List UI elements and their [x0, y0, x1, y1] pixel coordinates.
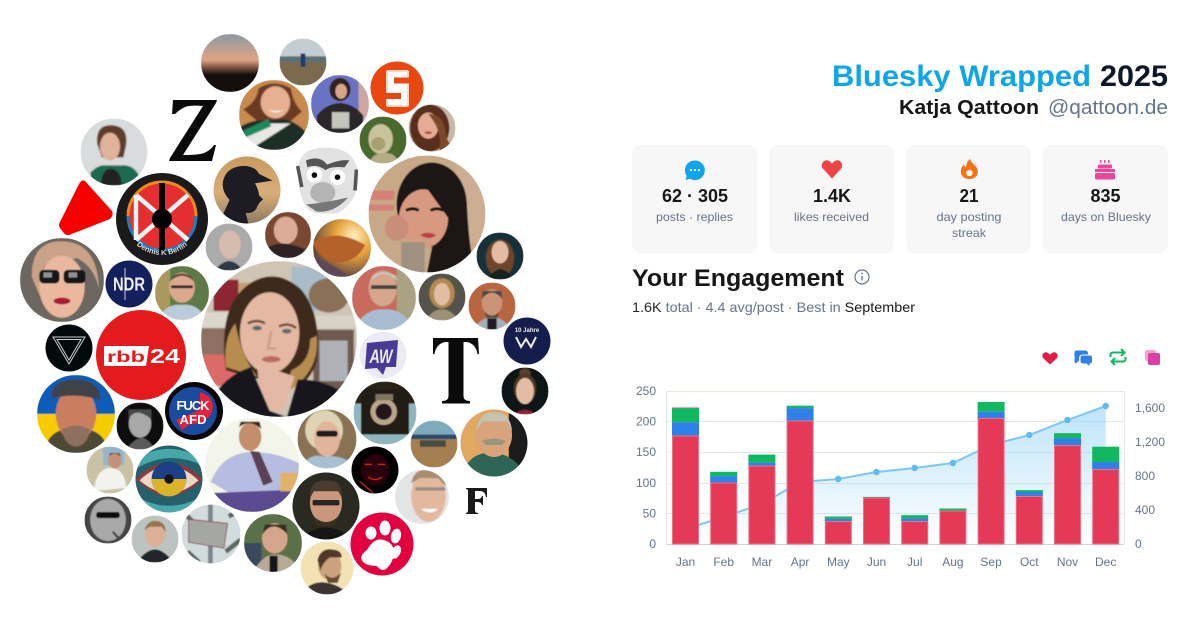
- logo: AW speech bubble: [360, 332, 406, 378]
- icon: likes: [1042, 352, 1058, 364]
- avatar: woman on purple: [311, 75, 369, 133]
- logo: NDR: [106, 260, 152, 308]
- label: day posting streak: [936, 210, 1002, 240]
- logo: FCK AFD button: FUCK: [176, 398, 210, 413]
- avatar: man with dark sunglasses: [84, 496, 132, 544]
- logo: T: [433, 338, 479, 404]
- icon: quotes: [1145, 350, 1160, 365]
- avatar: monochrome man: [116, 402, 164, 450]
- avatar: man writing at desk: [86, 446, 134, 494]
- left axis labels: 50: [643, 506, 656, 520]
- avatar: young blond man: [132, 516, 178, 562]
- avatar: man with glasses outdoors: [155, 266, 209, 320]
- avatar: woman with curly hair: [476, 232, 524, 280]
- month labels: Oct: [1020, 555, 1039, 569]
- avatar: glitchy dark face: [352, 446, 398, 494]
- month labels: Jul: [907, 555, 922, 569]
- logo: Z: [169, 100, 217, 161]
- avatar: vintage camera: [354, 382, 416, 444]
- stacked bars: [672, 402, 1119, 544]
- month labels: Mar: [752, 555, 772, 569]
- logo: FCK AFD button: [165, 382, 223, 440]
- avatar: cap silhouette: [214, 156, 280, 224]
- panel: day posting streak: [906, 145, 1031, 253]
- label: days on Bluesky: days on Bluesky: [1061, 210, 1151, 224]
- avatar: hair in sunlight: [313, 219, 371, 277]
- bar: Jan: [672, 407, 699, 544]
- month labels: Feb: [713, 555, 734, 569]
- month labels: Jun: [867, 555, 886, 569]
- avatar: bearded man with glasses: [292, 472, 360, 540]
- bar: Mar: [748, 455, 775, 544]
- avatar: bald man: [206, 224, 252, 270]
- right axis labels: 800: [1135, 469, 1155, 483]
- bar: Apr: [787, 406, 814, 544]
- bar: Jul: [901, 515, 928, 544]
- right axis labels: [1135, 401, 1165, 551]
- month labels: Jan: [676, 555, 695, 569]
- bar: Nov: [1054, 433, 1081, 544]
- area and line: cumulative total: [686, 403, 1109, 544]
- avatar: man in beige jacket: [244, 514, 302, 572]
- month labels: Apr: [791, 555, 809, 569]
- user name and handle: Katja Qattoon: [899, 97, 1039, 119]
- logo: NDR: NDR: [113, 274, 145, 294]
- bar: Dec: [1092, 447, 1119, 544]
- label: day posting streak: day posting: [936, 210, 1002, 224]
- avatar: Dennis K Berlin logo: [116, 173, 208, 265]
- bar: Sep: [978, 402, 1005, 544]
- icon: reposts: [1110, 349, 1126, 365]
- panel: likes received: [769, 145, 894, 253]
- bar: Feb: [710, 472, 737, 544]
- left axis labels: 250: [636, 384, 656, 398]
- title: Bluesky Wrapped: [832, 60, 1091, 93]
- bar: May: [825, 516, 852, 544]
- avatar: woman with award: [368, 156, 486, 275]
- avatar: older man in striped shirt: [352, 266, 416, 330]
- avatar: illustrated mustached man: [460, 410, 529, 476]
- avatar: woman with curly blonde hair: [418, 274, 466, 320]
- logo: 10 Jahre W: [504, 318, 550, 364]
- avatar: man at brick wall: [468, 282, 516, 330]
- right axis labels: 0: [1135, 537, 1142, 551]
- right axis labels: 1,600: [1135, 401, 1165, 415]
- icon: cake: [1095, 160, 1115, 180]
- right axis labels: 1,200: [1135, 435, 1165, 449]
- left axis labels: 150: [636, 445, 656, 459]
- bar: Oct: [1016, 490, 1043, 544]
- logo: 10 Jahre W: 10 Jahre: [515, 328, 540, 334]
- label: day posting streak: streak: [952, 226, 987, 240]
- left axis labels: 100: [636, 476, 656, 490]
- avatar: brunette woman: [408, 104, 456, 152]
- logo: AW speech bubble: AW: [369, 347, 394, 368]
- logo: black triangle: [46, 324, 92, 372]
- icon: info: [855, 270, 869, 284]
- user name and handle: @qattoon.de: [1048, 97, 1168, 119]
- avatar: orange S logo: [370, 62, 424, 114]
- avatar: man on Ukrainian flag: [37, 375, 115, 453]
- avatar cluster: [20, 34, 550, 594]
- month labels: Sep: [980, 555, 1002, 569]
- label: posts and replies: posts · replies: [656, 210, 733, 224]
- icon: flame: [961, 159, 978, 179]
- avatar: older man: [265, 212, 311, 258]
- logo: rbb24: [96, 310, 186, 400]
- logo: rbb24: rbb: [107, 349, 145, 366]
- avatar: eye with EU flag: [136, 446, 202, 512]
- left axis labels: 200: [636, 414, 656, 428]
- value: posts and replies: 62 · 305: [662, 186, 728, 206]
- avatar: man at lake: [280, 38, 326, 86]
- avatar: smiling woman in green: [239, 80, 309, 150]
- logo: red paw: [350, 512, 414, 576]
- title: 2025: [1100, 60, 1168, 93]
- avatar: blonde woman with sunglasses: [20, 238, 104, 322]
- value: day posting streak: 21: [960, 186, 978, 206]
- avatar: man lounging in shirt and tie: [205, 418, 299, 512]
- right axis labels: 400: [1135, 503, 1155, 517]
- heading: Your Engagement: Your Engagement: [632, 265, 844, 292]
- avatar: sunset: [201, 34, 259, 92]
- bar: Jun: [863, 497, 890, 544]
- label: likes received: likes received: [794, 210, 869, 224]
- panel: days on Bluesky: [1043, 145, 1168, 253]
- icon: chat bubble: [685, 160, 705, 180]
- logo: rbb24: 24: [150, 346, 181, 368]
- month labels: Dec: [1095, 555, 1116, 569]
- left axis labels: [636, 384, 656, 551]
- shape: red rounded triangle: [59, 180, 113, 235]
- month labels: Aug: [942, 555, 964, 569]
- bar: Aug: [939, 508, 966, 544]
- avatar: landscape with helicopter: [410, 420, 458, 468]
- logo: FCK AFD button: AFD: [180, 412, 206, 427]
- avatar: main woman in front of shelves: [201, 261, 357, 417]
- left axis labels: 0: [649, 537, 656, 551]
- avatar: woman with green jacket: [80, 118, 148, 186]
- avatar: woman with hair bun: [502, 368, 548, 414]
- panel: posts and replies: [632, 145, 757, 253]
- engagement summary: 1.6K total · 4.4 avg/post · Best in September: [632, 299, 915, 315]
- logo: F: [466, 488, 487, 514]
- user name and handle: [899, 97, 1168, 119]
- avatar: street sign: [182, 504, 240, 564]
- avatar: man with beard in profile: [300, 542, 354, 594]
- value: likes received: 1.4K: [813, 186, 851, 206]
- icon: replies: [1074, 350, 1092, 366]
- chart legend: [1042, 349, 1160, 366]
- month labels: May: [827, 555, 850, 569]
- avatar: garden statue: [360, 116, 406, 164]
- month labels: Nov: [1057, 555, 1078, 569]
- month labels: [676, 555, 1116, 569]
- avatar: smiling man with glasses: [395, 470, 449, 524]
- icon: heart: [822, 160, 842, 178]
- avatar: blond man smoking with sunglasses: [298, 410, 356, 468]
- value: days on Bluesky: 835: [1090, 186, 1120, 206]
- avatar: Dennis K Berlin logo: Dennis K Berlin: [136, 241, 188, 256]
- avatar: grumpy muppet: [296, 148, 358, 214]
- chart: monthly engagement: [636, 384, 1165, 569]
